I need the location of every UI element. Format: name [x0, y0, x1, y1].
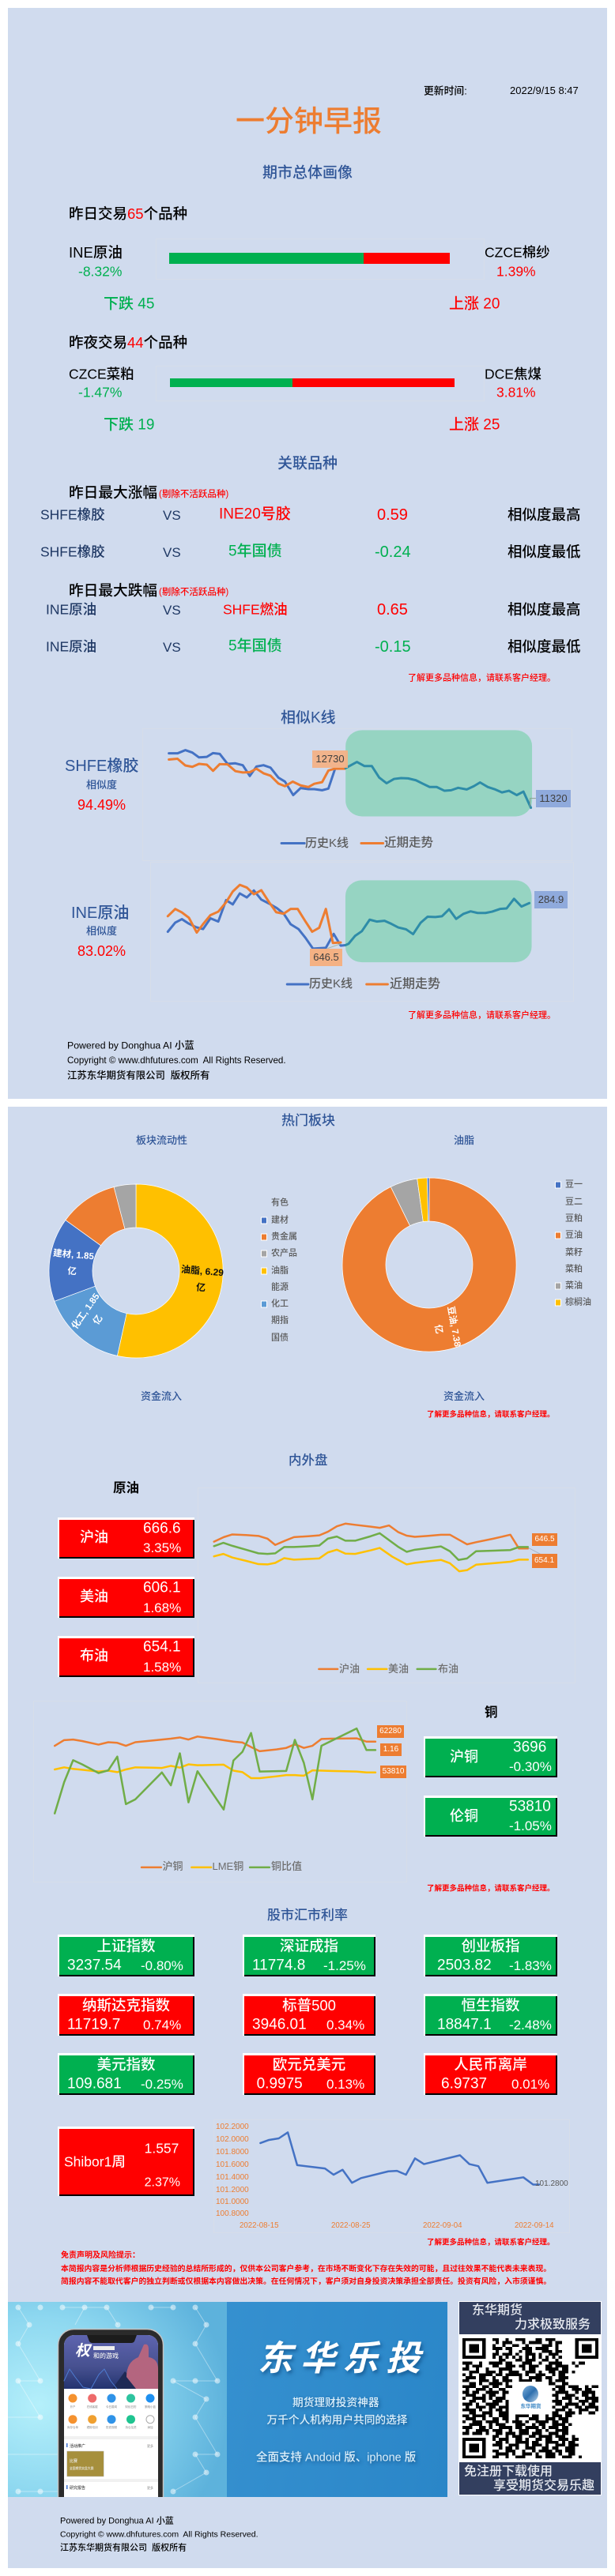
legend: LME copper: LME铜 — [212, 1860, 243, 1872]
illustration: hexagon network and phone: 理财培训 — [87, 2425, 98, 2429]
x axis labels: 2022-09-04 — [423, 2221, 462, 2230]
label: similarity: 相似度 — [86, 779, 117, 791]
legend item: rapeseed oil: 菜油 — [565, 1280, 583, 1290]
caption: capital inflow right: 资金流入 — [443, 1390, 485, 1402]
row 1 vs: VS — [163, 508, 181, 523]
row 1 similarity value: 0.59 — [377, 506, 408, 524]
end value tag: 11320 — [539, 792, 568, 804]
copyright line: Copyright © www.dhfutures.com All Rights Reserved. — [67, 1055, 286, 1066]
heading: sector liquidity: 板块流动性 — [136, 1134, 187, 1146]
legend swatch: soybean oil — [555, 1232, 561, 1239]
legend swatch: oils — [261, 1267, 267, 1274]
index card: offshore RMB — [424, 2053, 557, 2095]
banner left background — [8, 2302, 227, 2497]
illustration: hexagon network and phone: 活动推广 — [70, 2443, 85, 2449]
prompt line 2: 享受期货交易乐趣 — [493, 2479, 594, 2492]
legend: sector liquidity — [261, 1198, 297, 1342]
contact note: 了解更多品种信息，请联系客户经理。 — [427, 1884, 555, 1893]
name: 美元指数 — [96, 2055, 155, 2072]
credit line: Powered by Donghua AI 小蓝 — [67, 1040, 194, 1051]
banner platform support: 全面支持 Andoid 版、iphone 版 — [256, 2451, 416, 2464]
slice label: oils — [180, 1263, 224, 1293]
y axis labels: 102.2000 — [216, 2123, 249, 2131]
x axis labels: 2022-09-14 — [515, 2221, 554, 2230]
illustration: hexagon network and phone: 开户 — [70, 2405, 76, 2409]
slice label: chemicals: 化工, 1.85 — [70, 1292, 101, 1330]
row 3 base variety: INE原油 — [46, 602, 96, 618]
contact note: 了解更多品种信息，请联系客户经理。 — [427, 2238, 555, 2247]
legend item: palm oil: 棕榈油 — [565, 1297, 591, 1307]
line chart: crude oil — [198, 1487, 575, 1683]
legend: history: 历史K线 — [309, 977, 353, 991]
illustration: hexagon network and phone: 持仓龙虎 — [125, 2425, 137, 2429]
banner: Donghua Letou app promo — [8, 2302, 447, 2497]
bar segment: up — [292, 378, 455, 387]
label: INE crude: INE原油 — [71, 904, 129, 921]
illustration: hexagon network and phone: 在线客服 — [87, 2405, 98, 2409]
night up count: 上涨 25 — [449, 417, 500, 434]
y axis labels: 101.6000 — [216, 2160, 249, 2169]
panel: market overview, related varieties and similar K-line — [8, 8, 607, 1099]
change: 0.13% — [326, 2077, 364, 2092]
caption: capital inflow left: 资金流入 — [141, 1390, 182, 1402]
heading: domestic and overseas: 内外盘 — [289, 1453, 327, 1468]
legend item: soybean meal: 豆粕 — [565, 1213, 583, 1223]
index card: Nasdaq — [58, 1994, 194, 2035]
name: 美油 — [80, 1589, 108, 1605]
x axis labels: 2022-08-15 — [240, 2221, 279, 2230]
contact note: 了解更多品种信息，请联系客户经理。 — [427, 1410, 555, 1419]
row 4 similarity value: -0.15 — [375, 638, 411, 656]
row 2 similarity value: -0.24 — [375, 543, 411, 561]
value: 1.557 — [145, 2140, 179, 2156]
legend item: rapeseed meal: 菜粕 — [565, 1264, 583, 1273]
index card: US dollar index — [58, 2053, 194, 2095]
subheading: crude oil: 原油 — [113, 1481, 139, 1495]
row 4 base variety: INE原油 — [46, 638, 96, 654]
start value tag — [310, 949, 342, 966]
x axis labels: 2022-08-25 — [331, 2221, 371, 2230]
disclaimer heading: 免责声明及风险提示： — [61, 2251, 140, 2260]
row 3 vs: VS — [163, 603, 181, 618]
donut chart: oils — [341, 1177, 517, 1352]
logo mark — [523, 2386, 538, 2402]
day up count: 上涨 20 — [449, 296, 500, 313]
illustration: hexagon network and phone: 比赛 — [70, 2458, 77, 2464]
row 3 similarity value: 0.65 — [377, 601, 408, 619]
value tag: Brent crude: 654.1 — [534, 1556, 554, 1565]
change: 1.68% — [143, 1600, 181, 1615]
y axis labels: 100.8000 — [216, 2209, 249, 2218]
heading: related varieties: 关联品种 — [277, 456, 338, 472]
line chart: SHFE rubber similar K-line — [142, 728, 572, 861]
value tag: LME copper — [380, 1766, 406, 1778]
value tag: Shanghai crude — [532, 1532, 557, 1545]
subheading: copper: 铜 — [485, 1705, 498, 1720]
value tag: copper ratio — [380, 1743, 402, 1756]
contact note: 了解更多品种信息，请联系客户经理。 — [408, 673, 556, 683]
line chart: Shibor — [213, 2119, 570, 2233]
name: 欧元兑美元 — [273, 2055, 345, 2072]
legend swatch: building materials — [261, 1217, 267, 1224]
line chart: INE crude similar K-line — [150, 862, 574, 1002]
value: 11774.8 — [252, 1957, 305, 1974]
company line: 江苏东华期货有限公司 版权所有 — [60, 2543, 187, 2552]
y axis labels: 101.0000 — [216, 2198, 249, 2206]
title: 一分钟早报 — [236, 105, 382, 137]
banner brand name: 东华乐投 — [258, 2340, 428, 2379]
row 1 similarity label: 相似度最高 — [507, 506, 581, 523]
index card: Shanghai Composite — [58, 1935, 194, 1976]
change: -0.80% — [141, 1958, 183, 1973]
legend item: chemicals: 化工 — [271, 1299, 289, 1308]
value: SHFE rubber similarity: 94.49% — [77, 797, 126, 813]
legend item: treasury: 国债 — [271, 1333, 289, 1342]
biggest day gainer name: CZCE棉纱 — [485, 245, 550, 261]
slice label: oils: 油脂, 6.29 — [180, 1263, 224, 1278]
copyright line: Copyright © www.dhfutures.com All Rights Reserved. — [60, 2530, 258, 2540]
slice label: building materials: 亿 — [66, 1266, 77, 1277]
slogan block — [459, 2302, 601, 2334]
prompt line 1: 免注册下载使用 — [464, 2465, 553, 2478]
slice label: soybean oil — [432, 1306, 462, 1348]
legend item: precious metals: 贵金属 — [271, 1232, 297, 1241]
illustration: hexagon network and phone: 全国期货实盘大赛 — [70, 2466, 94, 2470]
legend item: soybean no.2: 豆二 — [565, 1197, 583, 1206]
legend item: soybean no.1: 豆一 — [565, 1179, 583, 1189]
row 1 peer variety: INE20号胶 — [219, 506, 291, 523]
legend item: building materials: 建材 — [271, 1215, 289, 1224]
row 4 vs: VS — [163, 640, 181, 655]
illustration: hexagon network and phone: 权 — [75, 2342, 92, 2360]
legend item: index futures: 期指 — [271, 1315, 289, 1325]
row 4 peer variety: 5年国债 — [228, 638, 282, 655]
company line: 江苏东华期货有限公司 版权所有 — [67, 1070, 209, 1081]
legend item: soybean oil: 豆油 — [565, 1230, 583, 1239]
legend item: agricultural: 农产品 — [271, 1248, 297, 1258]
disclaimer line 1: 本简报内容是分析师根据历史经验的总结所形成的，仅供本公司客户参考，在市场不断变化下存在失效的可能，且过往效果不能代表未来表现。 — [61, 2265, 551, 2273]
biggest day loser name: INE原油 — [69, 244, 123, 261]
legend item: nonferrous: 有色 — [271, 1198, 289, 1207]
line chart: copper — [33, 1701, 407, 1882]
legend swatch: palm oil — [555, 1299, 561, 1307]
subheading: biggest drop: 昨日最大跌幅 — [69, 582, 157, 599]
biggest night loser percent: -1.47% — [78, 384, 122, 400]
index card: Hang Seng — [424, 1994, 557, 2035]
note: excludes inactive varieties: (剔除不活跃品种) — [159, 490, 228, 499]
illustration: hexagon network and phone — [8, 2305, 220, 2497]
donut chart: sector liquidity — [49, 1183, 224, 1359]
value: 6.9737 — [441, 2076, 487, 2093]
night down count: 下跌 19 — [104, 417, 154, 434]
legend swatch: agricultural — [261, 1250, 267, 1258]
end value tag: 284.9 — [538, 893, 564, 905]
quote card: LME copper — [424, 1796, 557, 1837]
change: -0.25% — [141, 2077, 183, 2092]
disclaimer line 2: 简报内容不能取代客户的独立判断或仅根据本内容做出决策。在任何情况下，客户须对自身投资决策承担全部责任。投资有风险，入市须谨慎。 — [61, 2277, 551, 2286]
legend item: energy: 能源 — [271, 1282, 289, 1292]
row 4 similarity label: 相似度最低 — [507, 638, 581, 655]
value tag: Shanghai crude: 646.5 — [534, 1534, 555, 1544]
slice label: building materials — [52, 1248, 94, 1277]
biggest night gainer percent: 3.81% — [496, 384, 536, 400]
quote card: Brent crude — [58, 1636, 194, 1677]
subheading: biggest gain: 昨日最大涨幅 — [69, 484, 157, 501]
price: 654.1 — [143, 1639, 181, 1656]
rate card: Shibor 1 week — [58, 2127, 194, 2196]
night session count: 昨夜交易44个品种 — [69, 334, 187, 351]
banner tagline 2: 万千个人机构用户共同的选择 — [267, 2414, 407, 2426]
bar segment: down — [170, 378, 292, 387]
slice label: soybean oil: 豆油, 7.38 — [445, 1306, 462, 1348]
end value label: 101.2800 — [535, 2179, 568, 2188]
row 2 peer variety: 5年国债 — [228, 543, 282, 560]
value: 3237.54 — [67, 1957, 122, 1974]
value tag: Brent crude — [531, 1554, 557, 1567]
value: INE crude similarity: 83.02% — [77, 943, 126, 959]
illustration: hexagon network and phone: 研究报告 — [70, 2485, 85, 2491]
price: 3696 — [513, 1739, 546, 1755]
name: Shibor1周 — [64, 2153, 126, 2169]
note: excludes inactive varieties: (剔除不活跃品种) — [159, 588, 228, 597]
value tag: copper ratio: 1.16 — [383, 1744, 398, 1754]
legend: Shanghai crude: 沪油 — [339, 1663, 360, 1675]
credit line: Powered by Donghua AI 小蓝 — [60, 2516, 174, 2525]
panel: QR code download card — [458, 2301, 602, 2495]
logo text: 东华期货 — [520, 2404, 541, 2409]
value: 3946.01 — [252, 2017, 307, 2033]
row 3 peer variety: SHFE燃油 — [223, 602, 288, 618]
heading: oils: 油脂 — [454, 1134, 474, 1146]
legend item: rapeseed: 菜籽 — [565, 1247, 583, 1257]
index card: EUR/USD — [243, 2053, 375, 2095]
legend: oils — [555, 1179, 591, 1307]
change: 3.35% — [143, 1540, 181, 1555]
name: 恒生指数 — [461, 1996, 520, 2013]
name: 深证成指 — [280, 1937, 338, 1954]
legend: history: 历史K线 — [305, 837, 349, 850]
change: 1.58% — [143, 1659, 181, 1674]
change: -0.30% — [509, 1759, 552, 1774]
change: -2.48% — [509, 2018, 552, 2033]
index card: Shenzhen Component — [243, 1935, 375, 1976]
biggest day gainer percent: 1.39% — [496, 264, 536, 280]
illustration: hexagon network and phone: 库存仓单 — [67, 2425, 78, 2429]
slice label: chemicals: 亿 — [92, 1314, 104, 1326]
name: 标普500 — [282, 1996, 336, 2013]
download prompt block — [459, 2462, 601, 2495]
y axis labels — [216, 2123, 249, 2218]
row 1 base variety: SHFE橡胶 — [40, 507, 105, 523]
start value tag — [312, 750, 348, 768]
quote card: Shanghai copper — [424, 1736, 557, 1777]
illustration: hexagon network and phone: 财经日历 — [125, 2405, 137, 2409]
legend: Brent crude: 布油 — [438, 1663, 458, 1675]
price: 606.1 — [143, 1580, 181, 1596]
end value tag — [534, 891, 568, 908]
value: 2503.82 — [437, 1957, 492, 1974]
heading: market overview: 期市总体画像 — [262, 165, 353, 182]
price: 666.6 — [143, 1520, 181, 1536]
row 2 vs: VS — [163, 545, 181, 560]
change: 0.01% — [511, 2077, 549, 2092]
quote card: Shanghai crude — [58, 1517, 194, 1559]
label: SHFE rubber: SHFE橡胶 — [65, 757, 138, 774]
value tag: Shanghai copper — [377, 1725, 404, 1738]
price: 53810 — [509, 1798, 551, 1814]
change: -1.05% — [509, 1818, 552, 1833]
change: 0.34% — [326, 2018, 364, 2033]
legend: recent: 近期走势 — [384, 837, 433, 850]
value tag: Shanghai copper: 62280 — [379, 1727, 402, 1736]
index card: S&P 500 — [243, 1994, 375, 2035]
name: 上证指数 — [96, 1937, 155, 1954]
illustration: hexagon network and phone: 历史视频 — [106, 2425, 117, 2429]
name: 布油 — [80, 1649, 108, 1664]
legend: Shanghai copper: 沪铜 — [163, 1860, 183, 1872]
legend: copper ratio: 铜比值 — [271, 1860, 302, 1872]
quote card: WTI crude — [58, 1577, 194, 1618]
change: -1.83% — [509, 1958, 552, 1973]
change: -1.25% — [323, 1958, 366, 1973]
name: 人民币离岸 — [454, 2055, 527, 2072]
bar chart: night session up and down counts — [156, 366, 485, 401]
update time value: 2022/9/15 8:47 — [510, 85, 579, 96]
heading: hot sectors: 热门板块 — [281, 1113, 335, 1128]
name: 沪油 — [80, 1529, 108, 1545]
value: 18847.1 — [437, 2017, 492, 2033]
row 3 similarity label: 相似度最高 — [507, 601, 581, 618]
QR centre logo — [514, 2382, 548, 2413]
start value tag: 12730 — [315, 753, 345, 765]
value: 109.681 — [67, 2076, 122, 2093]
illustration: hexagon network and phone: 策略小蓝 — [145, 2405, 156, 2409]
day down count: 下跌 45 — [104, 296, 154, 313]
slice label: building materials: 建材, 1.85 — [52, 1248, 94, 1262]
day session count: 昨日交易65个品种 — [69, 205, 187, 222]
row 2 base variety: SHFE橡胶 — [40, 543, 105, 559]
legend swatch: chemicals — [261, 1300, 267, 1308]
y axis labels: 101.4000 — [216, 2173, 249, 2182]
disclaimer — [61, 2251, 551, 2286]
change: 0.74% — [143, 2018, 181, 2033]
bar chart: day session up and down counts — [156, 239, 485, 280]
slogan line 2: 力求极致服务 — [515, 2318, 590, 2331]
panel: hot sectors, markets, indices and footer — [8, 1107, 607, 2568]
illustration: hexagon network and phone: 更多 — [147, 2485, 153, 2490]
illustration: hexagon network and phone: 添加 — [147, 2425, 153, 2429]
legend: WTI crude: 美油 — [388, 1663, 409, 1675]
slogan line 1: 东华期货 — [472, 2303, 523, 2317]
change: 2.37% — [145, 2175, 180, 2189]
heading: similar K-line: 相似K线 — [281, 710, 336, 727]
y axis labels: 101.2000 — [216, 2186, 249, 2194]
name: 纳斯达克指数 — [82, 1996, 170, 2013]
start value tag: 646.5 — [313, 951, 339, 963]
index card: ChiNext — [424, 1935, 557, 1976]
QR code — [462, 2338, 598, 2458]
illustration: hexagon network and phone: 更多 — [147, 2443, 153, 2448]
bar segment: up — [364, 253, 450, 264]
legend swatch: soybean no.1 — [555, 1182, 561, 1188]
legend: recent: 近期走势 — [390, 977, 440, 991]
end value tag — [536, 790, 571, 807]
y axis labels: 101.8000 — [216, 2148, 249, 2157]
name: 沪铜 — [450, 1749, 478, 1765]
slice label: soybean oil: 亿 — [432, 1324, 443, 1334]
slice label: oils: 亿 — [195, 1281, 206, 1293]
legend swatch: precious metals — [261, 1234, 267, 1240]
biggest day loser percent: -8.32% — [78, 264, 122, 280]
illustration: hexagon network and phone: 和的游戏 — [93, 2352, 119, 2360]
biggest night gainer name: DCE焦煤 — [485, 367, 541, 382]
name: 伦铜 — [450, 1808, 478, 1824]
y axis labels: 102.0000 — [216, 2135, 249, 2144]
footer credits — [67, 1040, 286, 1081]
legend swatch: rapeseed oil — [555, 1283, 561, 1289]
value tag: LME copper: 53810 — [383, 1767, 404, 1776]
legend item: oils: 油脂 — [271, 1265, 289, 1275]
heading: stocks, FX and rates: 股市汇市利率 — [267, 1908, 348, 1923]
banner tagline 1: 期货理财投资神器 — [292, 2396, 379, 2408]
illustration: hexagon network and phone: 今日要闻 — [106, 2405, 117, 2409]
row 2 similarity label: 相似度最低 — [507, 543, 581, 560]
value: 0.9975 — [257, 2076, 303, 2093]
x axis labels — [240, 2221, 554, 2230]
update time label: 更新时间: — [424, 85, 467, 96]
value: 11719.7 — [67, 2017, 120, 2033]
bar segment: down — [169, 253, 364, 264]
contact note: 了解更多品种信息，请联系客户经理。 — [408, 1010, 556, 1020]
biggest night loser name: CZCE菜粕 — [69, 367, 134, 382]
label: similarity: 相似度 — [86, 925, 117, 937]
footer credits — [60, 2516, 258, 2552]
name: 创业板指 — [461, 1937, 520, 1954]
